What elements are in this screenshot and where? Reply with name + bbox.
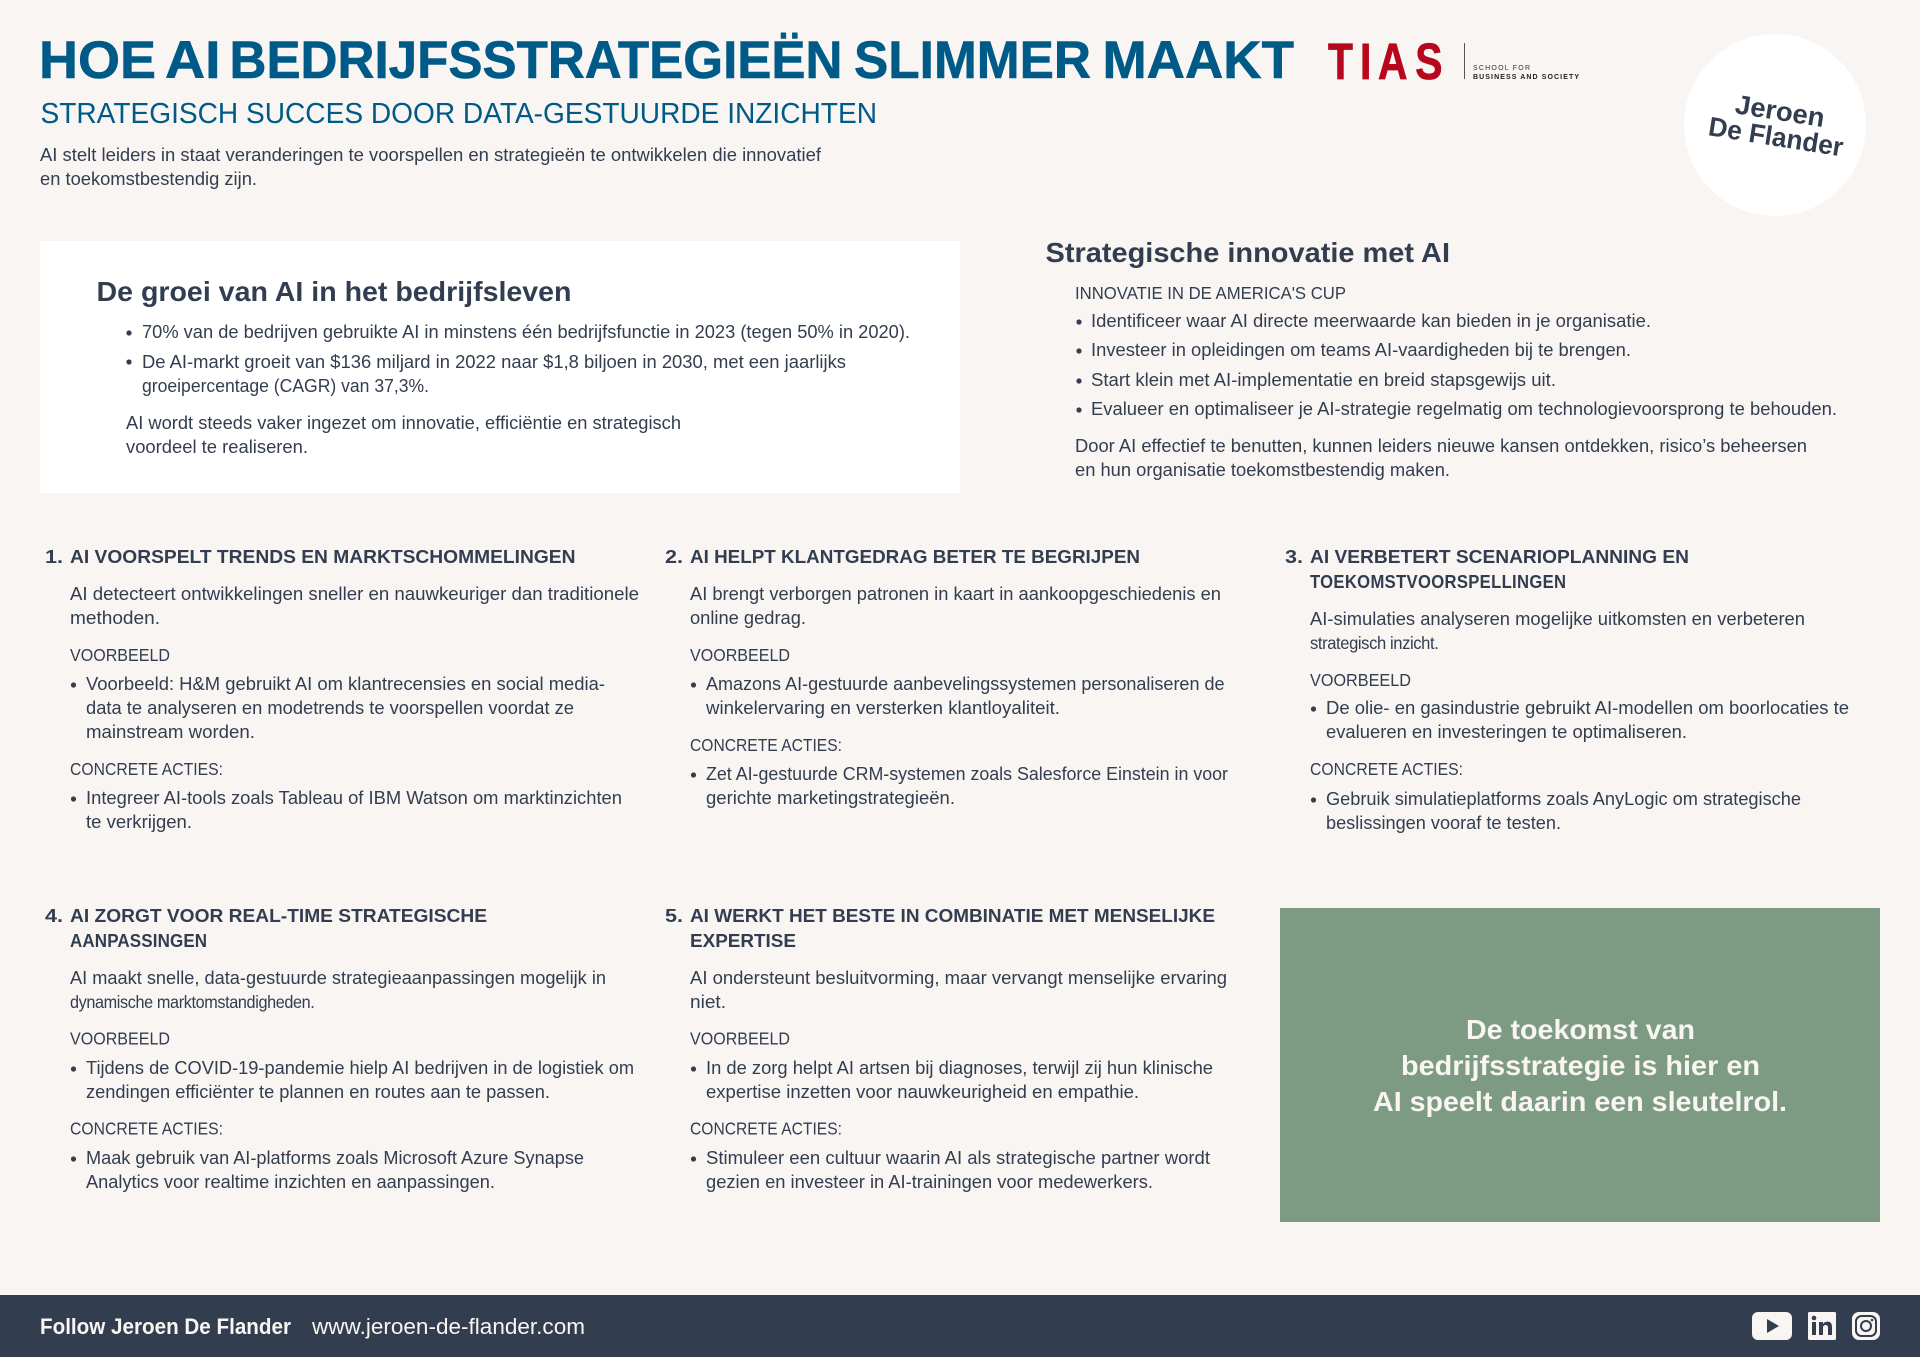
section 3 heading: 3.	[1285, 546, 1303, 567]
intro text: en toekomstbestendig zijn.	[40, 169, 257, 189]
innovation bullet list	[1076, 311, 1837, 419]
section 4 actions	[70, 1118, 584, 1192]
innovation bullet list: Investeer in opleidingen om teams AI-vaardigheden bij te brengen.	[1091, 340, 1631, 360]
section 4 actions: Maak gebruik van AI-platforms zoals Microsoft Azure Synapse	[86, 1148, 584, 1168]
section 5 example: expertise inzetten voor nauwkeurigheid en empathie.	[706, 1082, 1139, 1102]
section 5 heading: AI WERKT HET BESTE IN COMBINATIE MET MENSELIJKE	[690, 905, 1215, 926]
section 3 heading: AI VERBETERT SCENARIOPLANNING EN	[1310, 546, 1689, 567]
callout: green conclusion box: AI speelt daarin een sleutelrol.	[1373, 1086, 1787, 1117]
innovation bullet list: Identificeer waar AI directe meerwaarde kan bieden in je organisatie.	[1091, 311, 1651, 331]
intro text: AI stelt leiders in staat veranderingen te voorspellen en strategieën te ontwikkelen die innovatief	[40, 145, 822, 165]
header: title block	[39, 31, 1294, 189]
title: HOE	[39, 31, 156, 90]
section 1	[45, 546, 639, 832]
section 3 example: evalueren en investeringen te optimaliseren.	[1326, 722, 1687, 742]
section 2 heading: AI HELPT KLANTGEDRAG BETER TE BEGRIJPEN	[690, 546, 1140, 567]
icon: YouTube	[1752, 1312, 1792, 1340]
section 1 description: methoden.	[70, 608, 160, 628]
section 5 description: AI ondersteunt besluitvorming, maar vervangt menselijke ervaring	[690, 968, 1227, 988]
America's Cup label: INNOVATIE IN DE AMERICA'S CUP	[1075, 283, 1346, 303]
section 3 heading: TOEKOMSTVOORSPELLINGEN	[1310, 571, 1566, 592]
innovation conclusion: en hun organisatie toekomstbestendig maken.	[1075, 460, 1450, 480]
section 3 description: strategisch inzicht.	[1310, 632, 1439, 653]
section 5 heading	[665, 905, 1215, 951]
section 3 actions: beslissingen vooraf te testen.	[1326, 813, 1561, 833]
panel heading: innovation: Strategische innovatie met AI	[1046, 237, 1450, 268]
growth bullet list: 70% van de bedrijven gebruikte AI in minstens één bedrijfsfunctie in 2023 (tegen 50% in 2020).	[142, 322, 910, 342]
growth conclusion	[126, 413, 681, 457]
panel: De groei van AI in het bedrijfsleven	[40, 241, 960, 493]
section 4 heading: AANPASSINGEN	[70, 930, 207, 951]
panel heading: growth: De groei van AI in het bedrijfsleven	[96, 276, 572, 307]
title: AI	[165, 31, 220, 90]
title: MAAKT	[1102, 31, 1294, 90]
section 5 description: niet.	[690, 992, 726, 1012]
intro text	[40, 145, 822, 189]
icon: LinkedIn	[1808, 1312, 1836, 1340]
section 1 example	[70, 645, 605, 742]
icon: Instagram	[1852, 1312, 1880, 1340]
section 5 actions: gezien en investeer in AI-trainingen voor medewerkers.	[706, 1172, 1153, 1192]
section 4 actions: Analytics voor realtime inzichten en aanpassingen.	[86, 1172, 495, 1192]
section 5 actions: Stimuleer een cultuur waarin AI als strategische partner wordt	[706, 1148, 1210, 1168]
section 4 actions: CONCRETE ACTIES:	[70, 1118, 223, 1138]
section 4	[45, 905, 634, 1192]
section 5	[665, 905, 1227, 1192]
badge: Jeroen De Flander: Jeroen	[1733, 89, 1827, 133]
section 2	[665, 546, 1228, 808]
section 5 example: VOORBEELD	[690, 1028, 790, 1048]
section 1 actions	[70, 759, 622, 832]
section 1 actions: CONCRETE ACTIES:	[70, 759, 223, 779]
section 3 actions: CONCRETE ACTIES:	[1310, 759, 1463, 779]
panel: Strategische innovatie met AI	[1046, 237, 1837, 480]
section 5 actions: CONCRETE ACTIES:	[690, 1118, 842, 1138]
section 4 heading: 4.	[45, 905, 63, 926]
section 1 description	[70, 584, 639, 628]
title	[39, 31, 1294, 90]
section 1 example: mainstream worden.	[86, 722, 255, 742]
section 3 description	[1310, 609, 1805, 653]
logo: TIAS School for Business and Society: SCHOOL FOR	[1473, 65, 1530, 72]
section 4 description: AI maakt snelle, data-gestuurde strategieaanpassingen mogelijk in	[70, 968, 606, 988]
innovation bullet list: Evalueer en optimaliseer je AI-strategie regelmatig om technologievoorsprong te behouden.	[1091, 399, 1837, 419]
section 5 actions	[690, 1118, 1210, 1192]
section 4 example	[70, 1028, 634, 1102]
subtitle: STRATEGISCH SUCCES DOOR DATA-GESTUURDE INZICHTEN	[40, 98, 877, 130]
section 1 description: AI detecteert ontwikkelingen sneller en nauwkeuriger dan traditionele	[70, 584, 639, 604]
section 1 heading: AI VOORSPELT TRENDS EN MARKTSCHOMMELINGEN	[70, 546, 576, 567]
section 5 example	[690, 1028, 1213, 1102]
innovation conclusion	[1075, 436, 1807, 480]
section 2 actions: Zet AI-gestuurde CRM-systemen zoals Salesforce Einstein in voor	[706, 764, 1228, 784]
section 1 actions: te verkrijgen.	[86, 812, 192, 832]
footer website: www.jeroen-de-flander.com	[311, 1314, 585, 1339]
section 3 heading	[1285, 546, 1689, 592]
section 2 description: online gedrag.	[690, 608, 806, 628]
section 5 heading: EXPERTISE	[690, 930, 796, 951]
section 2 example	[690, 645, 1224, 718]
section 2 example: Amazons AI-gestuurde aanbevelingssystemen personaliseren de	[706, 674, 1224, 694]
section 1 example: VOORBEELD	[70, 645, 170, 665]
growth bullet list: De AI-markt groeit van $136 miljard in 2022 naar $1,8 biljoen in 2030, met een jaarlijks	[142, 352, 846, 372]
footer bar	[0, 1295, 1920, 1357]
growth bullet list	[126, 322, 910, 396]
section 3 description: AI-simulaties analyseren mogelijke uitkomsten en verbeteren	[1310, 609, 1805, 629]
section 4 example: Tijdens de COVID-19-pandemie hielp AI bedrijven in de logistiek om	[86, 1058, 634, 1078]
section 3 example	[1310, 670, 1849, 742]
section 4 description	[70, 968, 606, 1012]
section 5 description	[690, 968, 1227, 1012]
section 4 heading: AI ZORGT VOOR REAL-TIME STRATEGISCHE	[70, 905, 487, 926]
logo: TIAS School for Business and Society: BUSINESS AND SOCIETY	[1473, 74, 1579, 81]
innovation conclusion: Door AI effectief te benutten, kunnen leiders nieuwe kansen ontdekken, risico’s beheersen	[1075, 436, 1807, 456]
callout: green conclusion box: bedrijfsstrategie is hier en	[1401, 1050, 1760, 1081]
callout: green conclusion box	[1280, 908, 1880, 1222]
section 2 description: AI brengt verborgen patronen in kaart in aankoopgeschiedenis en	[690, 584, 1221, 604]
section 2 example: VOORBEELD	[690, 645, 790, 665]
section 3	[1285, 546, 1849, 833]
section 4 example: zendingen efficiënter te plannen en routes aan te passen.	[86, 1082, 550, 1102]
section 2 example: winkelervaring en versterken klantloyaliteit.	[705, 698, 1060, 718]
logo: TIAS School for Business and Society	[1328, 33, 1579, 90]
section 2 actions	[690, 735, 1228, 808]
section 4 heading	[45, 905, 487, 951]
section 5 example: In de zorg helpt AI artsen bij diagnoses, terwijl zij hun klinische	[706, 1058, 1213, 1078]
section 1 actions: Integreer AI-tools zoals Tableau of IBM Watson om marktinzichten	[86, 788, 622, 808]
section 1 example: Voorbeeld: H&M gebruikt AI om klantrecensies en social media-	[86, 674, 605, 694]
badge: Jeroen De Flander	[1684, 34, 1866, 216]
section 2 actions: gerichte marketingstrategieën.	[706, 788, 955, 808]
title: BEDRIJFSSTRATEGIEËN	[230, 31, 842, 90]
logo: TIAS School for Business and Society: TIAS	[1328, 33, 1442, 90]
footer name: Follow Jeroen De Flander	[40, 1314, 291, 1339]
section 3 actions: Gebruik simulatieplatforms zoals AnyLogic om strategische	[1326, 789, 1801, 809]
section 2 actions: CONCRETE ACTIES:	[690, 735, 842, 755]
section 4 description: dynamische marktomstandigheden.	[70, 992, 315, 1012]
section 1 heading: 1.	[45, 546, 63, 567]
badge: Jeroen De Flander: De Flander	[1706, 111, 1846, 162]
section 2 description	[690, 584, 1221, 628]
section 2 heading: 2.	[665, 546, 683, 567]
section 1 example: data te analyseren en modetrends te voorspellen voordat ze	[86, 698, 574, 718]
growth conclusion: voordeel te realiseren.	[126, 437, 308, 457]
section 5 heading: 5.	[665, 905, 683, 926]
title: SLIMMER	[854, 31, 1091, 90]
callout: green conclusion box: De toekomst van	[1466, 1014, 1695, 1045]
section 4 example: VOORBEELD	[70, 1028, 170, 1048]
growth bullet list: groeipercentage (CAGR) van 37,3%.	[142, 376, 429, 396]
section 3 example: VOORBEELD	[1310, 670, 1411, 690]
section 3 example: De olie- en gasindustrie gebruikt AI-modellen om boorlocaties te	[1326, 698, 1849, 718]
section 3 actions	[1310, 759, 1801, 833]
innovation bullet list: Start klein met AI-implementatie en breid stapsgewijs uit.	[1091, 370, 1556, 390]
growth conclusion: AI wordt steeds vaker ingezet om innovatie, efficiëntie en strategisch	[126, 413, 681, 433]
